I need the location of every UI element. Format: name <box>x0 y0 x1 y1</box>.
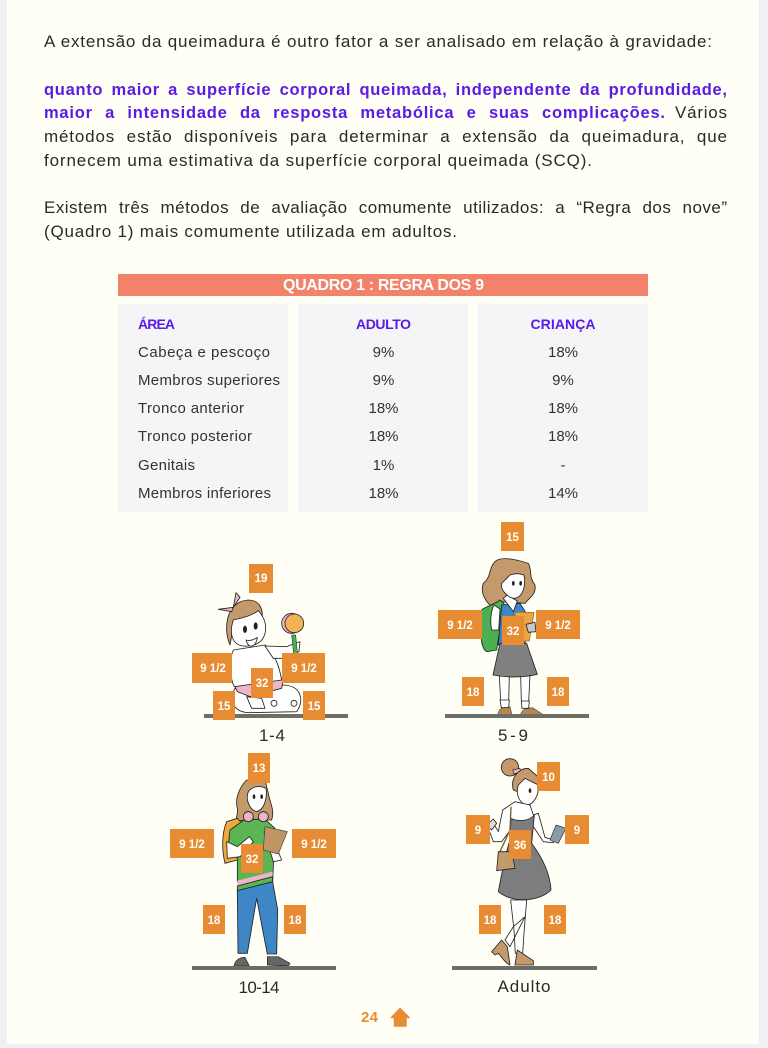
value box: left arm: 9 1/2 <box>179 839 205 851</box>
column: área: Membros superiores <box>138 372 280 389</box>
value box: left arm <box>466 815 490 844</box>
value box: trunk: 32 <box>246 854 258 866</box>
value box: right arm: 9 <box>574 825 580 837</box>
value box: right leg <box>547 677 569 706</box>
column: criança: 14% <box>548 485 578 502</box>
value box: right leg <box>303 691 325 720</box>
text block: extent paragraph: métodos estão disponíveis para determinar a extensão da queimadura, que <box>44 127 727 146</box>
value box: left arm <box>192 653 232 683</box>
text block: extent paragraph: maior a intensidade da resposta metabólica e suas complicações. <box>44 104 665 122</box>
column: adulto: 18% <box>368 400 399 417</box>
value box: head <box>501 522 524 551</box>
value box: left arm: 9 <box>475 825 481 837</box>
value box: right leg <box>284 905 306 934</box>
column: adulto <box>298 304 468 512</box>
value box: trunk <box>251 668 273 698</box>
column: adulto: ADULTO <box>356 316 411 332</box>
table: Quadro 1 <box>118 274 648 512</box>
value box: right leg: 18 <box>289 915 302 927</box>
illustration: girl with backpack <box>481 559 543 714</box>
column: criança: 18% <box>548 344 578 361</box>
value box: left leg: 18 <box>484 915 497 927</box>
value box: right leg <box>544 905 566 934</box>
value box: right arm <box>565 815 589 844</box>
value box: left leg <box>203 905 225 934</box>
age label: 5-9 <box>498 726 528 745</box>
value box: head: 19 <box>255 573 267 585</box>
value box: right arm <box>292 829 336 858</box>
icon: home <box>392 1008 409 1026</box>
ground line <box>192 966 336 970</box>
value box: head <box>537 762 560 791</box>
value box: head: 15 <box>506 532 519 544</box>
column: área <box>118 304 288 512</box>
column: área: Genitais <box>138 457 195 474</box>
ground line <box>204 714 348 718</box>
column: adulto: 1% <box>373 457 394 474</box>
value box: left leg <box>213 691 235 720</box>
ground line <box>445 714 589 718</box>
value box: right arm: 9 1/2 <box>301 839 327 851</box>
value box: right arm <box>282 653 325 683</box>
value box: trunk <box>509 830 531 859</box>
value box: right arm: 9 1/2 <box>545 620 571 632</box>
value box: left leg: 15 <box>218 701 231 713</box>
illustration: teenager with headphones <box>223 780 290 966</box>
value box: head: 13 <box>253 763 265 775</box>
value box: left arm <box>170 829 214 858</box>
value box: right leg: 18 <box>549 915 562 927</box>
column: área: Tronco posterior <box>138 428 252 445</box>
column: área: Tronco anterior <box>138 400 244 417</box>
value box: right leg: 15 <box>308 701 321 713</box>
age label: 1-4 <box>259 726 285 745</box>
illustration: woman with dress <box>487 759 566 965</box>
value box: left leg <box>462 677 484 706</box>
value box: right leg: 18 <box>552 687 565 699</box>
column: adulto: 9% <box>373 372 394 389</box>
text block: methods paragraph <box>44 198 727 241</box>
value box: head: 10 <box>542 772 555 784</box>
page number: 24 <box>361 1009 379 1026</box>
value box: trunk: 32 <box>507 626 519 638</box>
value box: head <box>248 753 270 783</box>
value box: trunk <box>241 844 263 873</box>
text block: extent paragraph <box>44 81 727 170</box>
value box: trunk <box>502 616 524 645</box>
column: área: Cabeça e pescoço <box>138 344 270 361</box>
column: criança: - <box>560 457 566 474</box>
value box: left arm: 9 1/2 <box>447 620 473 632</box>
text block: extent paragraph: fornecem uma estimativa da superfície corporal queimada (SCQ). <box>44 151 592 170</box>
figure: age 10-14 <box>170 753 336 997</box>
age label: 10-14 <box>238 978 280 997</box>
value box: left arm <box>438 610 482 639</box>
column: criança: 18% <box>548 400 578 417</box>
value box: left leg: 18 <box>467 687 480 699</box>
illustration: baby <box>218 593 304 713</box>
text block: methods paragraph: (Quadro 1) mais comumente utilizada em adultos. <box>44 222 457 241</box>
text block: extent paragraph: Vários <box>675 103 727 122</box>
figure: age 5-9 <box>438 522 589 745</box>
value box: right arm <box>536 610 580 639</box>
value box: head <box>249 564 273 593</box>
figure: age 1-4 <box>192 564 348 745</box>
value box: right arm: 9 1/2 <box>291 663 317 675</box>
value box: trunk: 32 <box>256 678 268 690</box>
column: criança: 9% <box>552 372 574 389</box>
table title bar <box>118 274 648 296</box>
column: criança: 18% <box>548 428 578 445</box>
text block: extent paragraph: quanto maior a superfície corporal queimada, independente da profundidade, <box>44 81 727 99</box>
text block: methods paragraph: Existem três métodos de avaliação comumente utilizados: a “Regra dos nove” <box>44 198 727 217</box>
value box: left leg: 18 <box>208 915 221 927</box>
value box: left arm: 9 1/2 <box>200 663 226 675</box>
column: adulto: 18% <box>368 485 399 502</box>
text block: intro: A extensão da queimadura é outro fator a ser analisado em relação à gravidade: <box>44 32 712 51</box>
ground line <box>452 966 597 970</box>
column: adulto: 18% <box>368 428 399 445</box>
table title bar: QUADRO 1 : REGRA DOS 9 <box>283 277 484 294</box>
column: área: ÁREA <box>138 316 175 332</box>
value box: trunk: 36 <box>514 840 526 852</box>
age label: Adulto <box>498 977 550 996</box>
figure: adult <box>452 759 597 996</box>
column: criança <box>478 304 648 512</box>
column: adulto: 9% <box>373 344 394 361</box>
column: área: Membros inferiores <box>138 485 271 502</box>
column: criança: CRIANÇA <box>530 316 596 332</box>
value box: left leg <box>479 905 501 934</box>
